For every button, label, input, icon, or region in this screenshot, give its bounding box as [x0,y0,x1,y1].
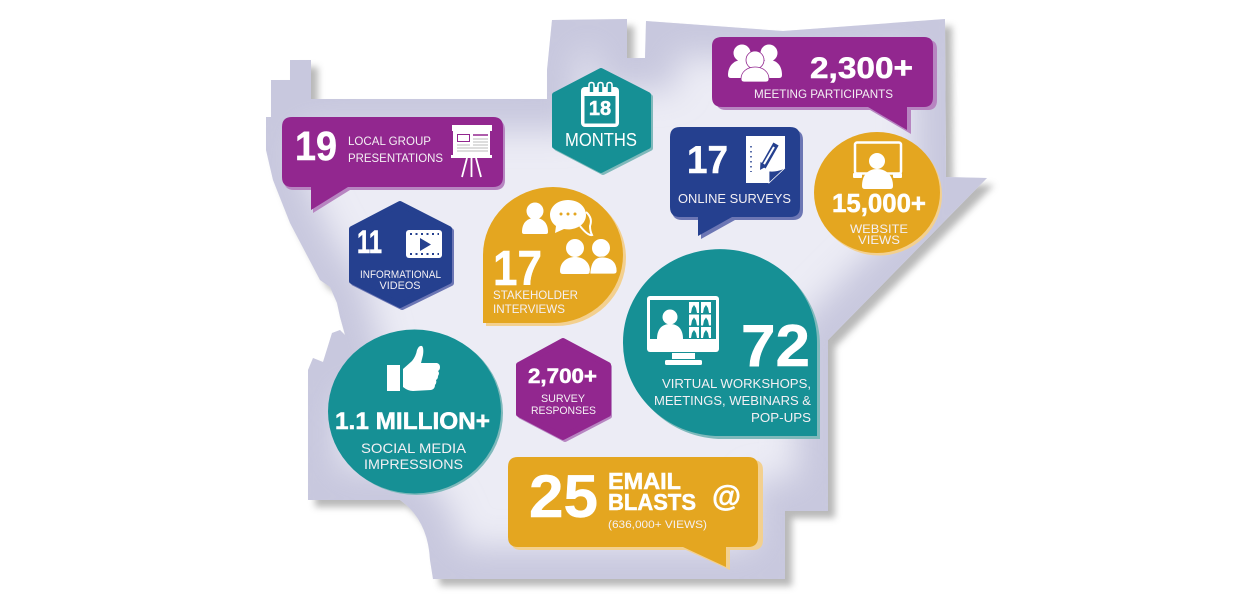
callout: 25 email blasts: BLASTS [608,489,696,515]
hexagon: 11 informational videos [352,204,451,307]
badge: 72 virtual workshops: VIRTUAL WORKSHOPS, [662,377,811,391]
badge: 17 stakeholder interviews [483,187,626,326]
callout: 25 email blasts: 25 [529,463,598,530]
badge: 72 virtual workshops: 72 [741,313,810,379]
badge: 17 stakeholder interviews: STAKEHOLDER [493,288,578,302]
hexagon: 18 months [555,71,650,172]
icon: at sign: @ [712,480,741,513]
callout: 17 online surveys: 17 [687,139,728,182]
icon: video call monitor [647,296,719,365]
callout: 17 online surveys: ONLINE SURVEYS [678,191,791,206]
icon: video [406,230,442,258]
hexagon: 18 months: MONTHS [565,130,637,150]
badge: 1.1 million social media impressions [328,330,503,495]
hexagon: 11 informational videos: VIDEOS [380,280,420,292]
hexagon: 2,700+ survey responses: RESPONSES [531,405,596,417]
icon: presentation board [451,125,492,177]
callout: 19 local group presentations [282,117,505,213]
badge: 1.1 million social media impressions: 1.1 MILLION+ [335,408,490,435]
badge: 17 stakeholder interviews: 17 [493,242,542,296]
badge: 72 virtual workshops: POP-UPS [751,411,811,425]
callout: 17 online surveys [670,127,803,239]
hexagon: 2,700+ survey responses: SURVEY [541,393,586,405]
callout: 19 local group presentations: 19 [295,123,337,169]
icon: group of people [728,44,782,82]
callout: 2,300+ meeting participants: MEETING PARTICIPANTS [754,87,893,101]
icon: calendar: 18 [589,98,611,120]
badge: 17 stakeholder interviews: INTERVIEWS [493,302,565,316]
callout: 19 local group presentations: LOCAL GROUP [348,136,431,148]
icon: person at monitor [853,142,902,189]
badge: 15,000+ website views: WEBSITE [850,224,908,236]
hexagon: 11 informational videos: INFORMATIONAL [360,269,441,281]
callout: 2,300+ meeting participants: 2,300+ [810,52,913,85]
callout: 19 local group presentations: PRESENTATIONS [348,153,443,165]
badge: 72 virtual workshops: MEETINGS, WEBINARS & [654,394,812,408]
icon: people talking [522,200,617,274]
callout: 2,300+ meeting participants [712,37,937,134]
hexagon: 2,700+ survey responses: 2,700+ [528,365,597,388]
hexagon: 2,700+ survey responses [519,341,609,439]
badge: 15,000+ website views: VIEWS [858,235,900,247]
badge: 72 virtual workshops [623,249,820,439]
badge: 15,000+ website views [814,132,942,256]
icon: thumbs up [387,346,440,391]
hexagon: 11 informational videos: 11 [357,224,382,260]
badge: 1.1 million social media impressions: IMPRESSIONS [364,456,463,472]
callout: 25 email blasts: EMAIL [608,468,681,494]
badge: 15,000+ website views: 15,000+ [832,188,926,218]
icon: paper and pencil [746,136,785,183]
badge: 1.1 million social media impressions: SOCIAL MEDIA [361,440,467,456]
map silhouette background [266,19,994,586]
callout: 25 email blasts: (636,000+ VIEWS) [608,519,707,531]
callout: 25 email blasts [508,457,763,570]
